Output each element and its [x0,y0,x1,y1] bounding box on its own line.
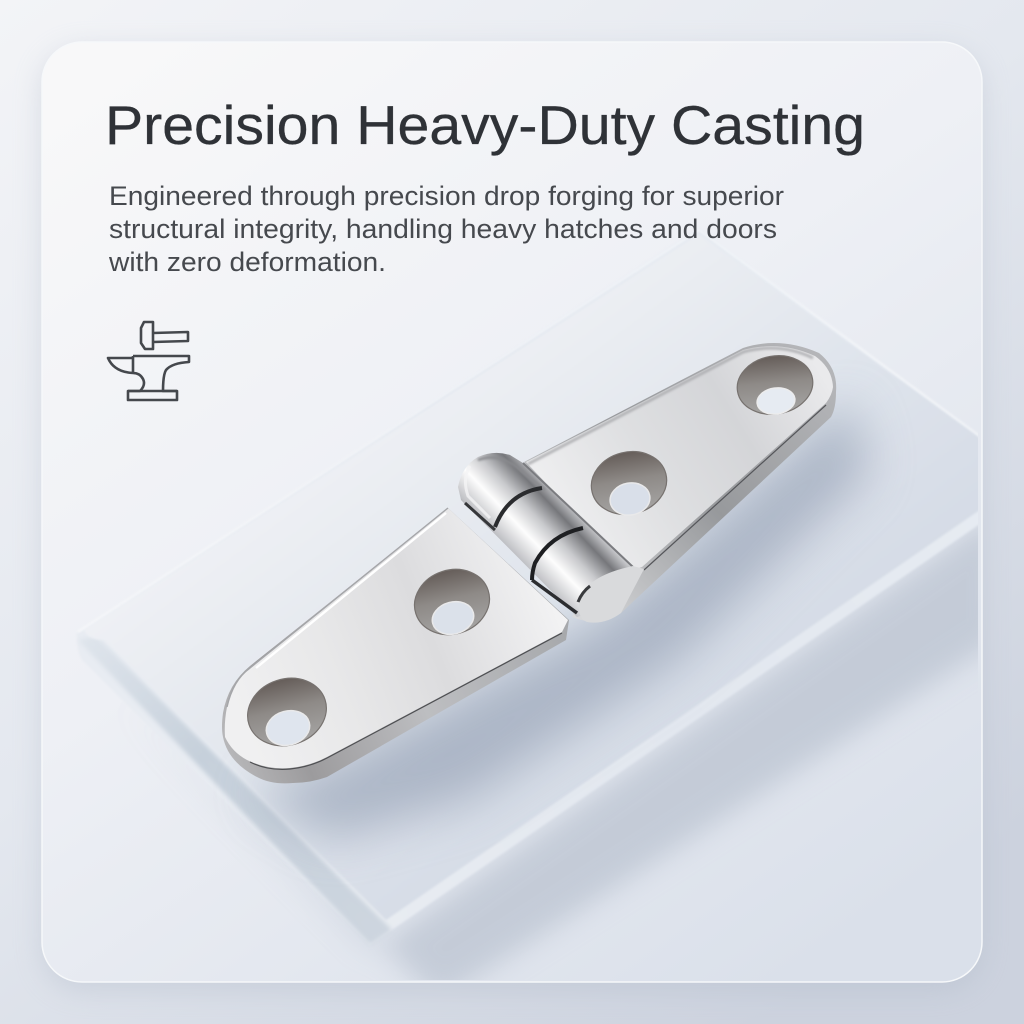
hinge left leaf [222,508,569,783]
hinge shadow [250,400,870,840]
hole 4 [733,350,817,420]
hole 3 [585,444,673,522]
barrel gap 1 [495,488,542,527]
description text: with zero deformation. [108,247,386,277]
description text: Engineered through precision drop forging for superior [109,181,784,211]
barrel gap 2 [532,528,583,580]
hinge [222,343,836,783]
hinge barrel [458,453,644,623]
description text [108,181,784,277]
hinge right leaf [524,343,836,622]
title: Precision Heavy-Duty Casting [105,94,865,156]
glass plate [77,228,1000,1000]
hole 1 [239,668,335,756]
barrel end cap [579,566,644,623]
hole 2 [406,560,498,644]
icon: hammer and anvil [108,322,189,400]
description text: structural integrity, handling heavy hatches and doors [109,214,777,244]
